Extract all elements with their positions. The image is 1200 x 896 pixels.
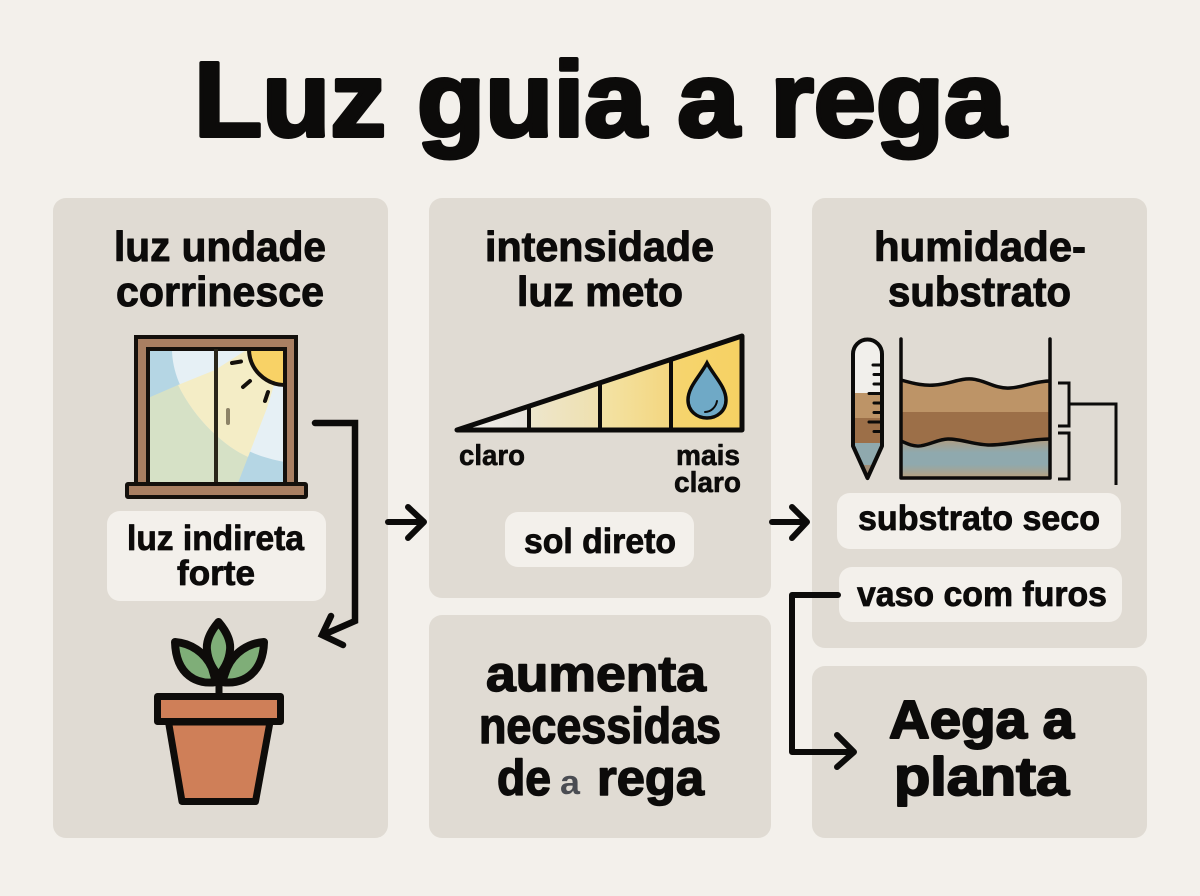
heading: luz undade corrinesce [114, 223, 326, 315]
heading: humidade-substrato [874, 223, 1086, 315]
label: vaso com furos [839, 567, 1122, 622]
panel: aumenta necessidas de a rega: aumenta [486, 646, 707, 702]
label: vaso com furos: vaso com furos [857, 575, 1107, 614]
label: mais claro: claro [674, 467, 741, 499]
arrow: vaso to rega [792, 595, 854, 767]
panel: luz [53, 198, 388, 838]
icon: window with sun [127, 337, 306, 497]
label: substrato seco [837, 493, 1121, 549]
panel: aumenta necessidas de a rega: rega [597, 750, 705, 806]
label: luz indireta forte: luz indireta [127, 519, 305, 558]
icon: soil layers container [901, 339, 1050, 478]
heading: intensidade luz meto: intensidade [485, 223, 714, 270]
label: claro: claro [459, 440, 525, 472]
label: sol direto: sol direto [524, 522, 676, 561]
heading: intensidade luz meto [485, 223, 714, 315]
panel: rega a planta: planta [894, 747, 1070, 807]
heading: intensidade luz meto: luz meto [517, 268, 683, 315]
panel: aumenta necessidas de a rega: necessidas [479, 698, 721, 754]
icon: water drop [688, 363, 726, 418]
chart: light intensity wedge [457, 336, 742, 430]
panel: aumenta necessidas de a rega [429, 615, 771, 838]
panel: humidade-substrato [812, 198, 1147, 648]
icon: potted plant [158, 622, 280, 802]
heading: humidade-substrato: substrato [888, 268, 1071, 315]
panel: intensidade [429, 198, 771, 598]
icon: layer brackets [1058, 383, 1116, 485]
title: Luz guia a rega [194, 41, 1007, 159]
panel: aumenta necessidas de a rega: a [560, 764, 581, 802]
label: substrato seco: substrato seco [858, 499, 1100, 538]
panel: rega a planta [812, 666, 1147, 838]
icon: moisture probe [853, 340, 882, 478]
arrow: panel 1 to panel 2 [388, 507, 424, 538]
heading: humidade-substrato: humidade- [874, 223, 1086, 270]
label: sol direto [505, 512, 694, 567]
label: luz indireta forte: forte [177, 554, 255, 593]
arrow: window to plant [315, 423, 355, 645]
heading: luz undade corrinesce: luz undade [114, 223, 326, 270]
label: luz indireta forte [107, 511, 326, 601]
panel: rega a planta: Aega a [889, 690, 1075, 750]
heading: luz undade corrinesce: corrinesce [116, 268, 324, 315]
label: mais claro [674, 440, 741, 499]
arrow: panel 2 to panel 3 [772, 507, 807, 538]
panel: aumenta necessidas de a rega: de [497, 750, 551, 806]
label: mais claro: mais [676, 440, 740, 472]
